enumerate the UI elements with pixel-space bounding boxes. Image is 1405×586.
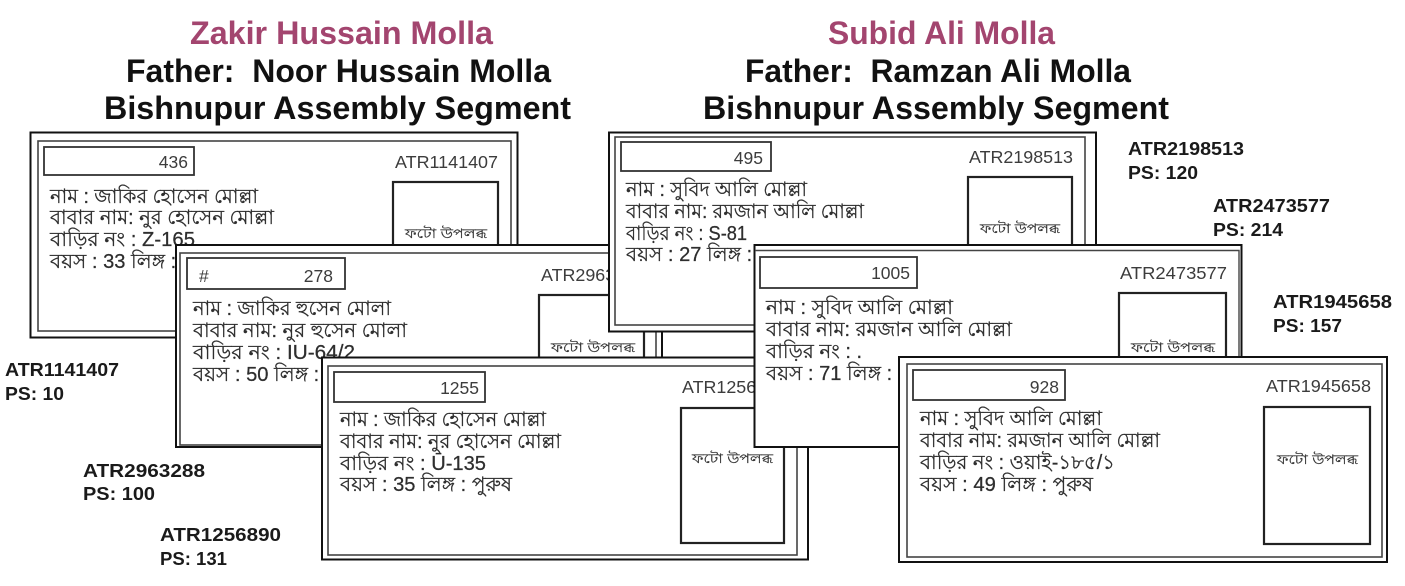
voter card: Subid 495: নাম : সুবিদ আলি মোল্লা [625,178,808,201]
label: ATR1256890 PS 131 [160,525,281,569]
voter card: Zakir 1255: বয়স : 35 লিঙ্গ : পুরুষ [339,473,513,496]
voter card: Subid 928 [899,357,1387,562]
heading: Zakir Hussain Molla: Bishnupur Assembly Segment [104,90,571,126]
heading: Zakir Hussain Molla [104,15,571,126]
heading: Subid Ali Molla: Subid Ali Molla [828,15,1055,51]
voter card: Zakir 278: বাড়ির নং : IU-64/2 [192,341,355,364]
voter card: Subid 1005: বয়স : 71 লিঙ্গ : পুরুষ [765,362,939,385]
label: ATR1945658 PS 157 [1273,292,1392,336]
label: ATR2198513 PS 120: PS: 120 [1128,163,1198,183]
voter card: Zakir 436: 436 [159,152,188,172]
voter card: Zakir 278: বয়স : 50 লিঙ্গ : পুরুষ [192,363,366,386]
label: ATR2473577 PS 214 [1213,196,1330,240]
voter card: Subid 1005: নাম : সুবিদ আলি মোল্লা [765,296,954,319]
voter card: Zakir 436: ফটো উপলব্ধ [404,226,488,241]
label: ATR2198513 PS 120 [1128,139,1244,183]
heading: Zakir Hussain Molla: Father: Noor Hussain Molla [126,53,551,89]
heading: Subid Ali Molla: Father: Ramzan Ali Molla [745,53,1131,89]
voter card: Subid 1005: বাড়ির নং : . [765,340,862,363]
label: ATR2473577 PS 214: PS: 214 [1213,220,1283,240]
voter card: Zakir 278: ATR2963288 [541,265,645,285]
label: ATR2198513 PS 120: ATR2198513 [1128,139,1244,159]
label: ATR1141407 PS 10: PS: 10 [5,384,64,404]
voter card: Zakir 436 [30,132,518,338]
voter card: Zakir 1255: ফটো উপলব্ধ [691,451,774,466]
voter card: Zakir 1255: নাম : জাকির হোসেন মোল্লা [339,408,547,431]
voter card: Zakir 278 [176,245,662,447]
label: ATR2963288 PS 100: PS: 100 [83,484,155,504]
voter card: Subid 495: ফটো উপলব্ধ [979,221,1061,236]
voter card: Subid 928: ATR1945658 [1266,376,1371,396]
label: ATR1945658 PS 157: PS: 157 [1273,316,1342,336]
voter card: Subid 495: ATR2198513 [969,147,1073,167]
voter card: Zakir 436: নাম : জাকির হোসেন মোল্লা [49,185,259,208]
voter card: Subid 928: 928 [1030,377,1059,397]
label: ATR1141407 PS 10: ATR1141407 [5,360,119,380]
label: ATR2963288 PS 100: ATR2963288 [83,461,205,481]
voter card: Zakir 278: বাবার নাম: নুর হুসেন মোলা [192,320,408,342]
voter card: Subid 928: বাড়ির নং : ওয়াই-১৮৫/১ [919,451,1115,474]
voter card: Subid 495: 495 [734,148,763,168]
voter card: Zakir 1255: বাবার নাম: নুর হোসেন মোল্লা [339,431,562,453]
label: ATR1141407 PS 10 [5,360,119,404]
voter card: Subid 495: বাবার নাম: রমজান আলি মোল্লা [625,200,865,223]
heading: Subid Ali Molla: Bishnupur Assembly Segment [703,90,1169,126]
voter card: Subid 1005: ATR2473577 [1120,263,1227,283]
heading: Zakir Hussain Molla: Zakir Hussain Molla [190,15,493,51]
voter card: Zakir 1255: বাড়ির নং : Ū-135 [339,452,486,475]
voter card: Zakir 436: বাবার নাম: নুর হোসেন মোল্লা [49,207,275,229]
voter card: Subid 928: ফটো উপলব্ধ [1276,452,1359,467]
voter card: Subid 495: বাড়ির নং : S-81 [625,222,747,245]
voter card: Zakir 436: ATR1141407 [395,152,498,172]
heading: Subid Ali Molla [703,15,1169,126]
voter card: Zakir 436: বয়স : 33 লিঙ্গ : পুরুষ [49,250,223,273]
voter card: Zakir 278: 278 [304,266,333,286]
voter card: Zakir 1255: ATR1256890 [682,377,786,397]
voter card: Subid 928: নাম : সুবিদ আলি মোল্লা [919,407,1103,430]
voter card: Zakir 278: নাম : জাকির হুসেন মোলা [192,297,392,320]
voter card: Subid 1005: 1005 [871,263,910,283]
voter card: Subid 928: বাবার নাম: রমজান আলি মোল্লা [919,429,1161,452]
label: ATR2473577 PS 214: ATR2473577 [1213,196,1330,216]
label: ATR1945658 PS 157: ATR1945658 [1273,292,1392,312]
voter card: Zakir 1255: 1255 [440,378,479,398]
voter card: Subid 1005: বাবার নাম: রমজান আলি মোল্লা [765,318,1013,341]
voter card: Subid 1005: ফটো উপলব্ধ [1130,340,1216,355]
voter card: Subid 1005 [754,245,1242,447]
label: ATR2963288 PS 100 [83,461,205,504]
voter card: Subid 495 [609,132,1096,332]
voter card: Zakir 278: # [199,266,209,286]
voter card: Zakir 436: বাড়ির নং : Z-165 [49,228,195,251]
voter card: Zakir 278: ফটো উপলব্ধ [550,340,636,355]
label: ATR1256890 PS 131: PS: 131 [160,549,227,569]
voter card: Subid 495: বয়স : 27 লিঙ্গ : পুরুষ [625,243,799,266]
voter card: Zakir 1255 [322,358,808,560]
voter card: Subid 928: বয়স : 49 লিঙ্গ : পুরুষ [919,473,1094,496]
label: ATR1256890 PS 131: ATR1256890 [160,525,281,545]
